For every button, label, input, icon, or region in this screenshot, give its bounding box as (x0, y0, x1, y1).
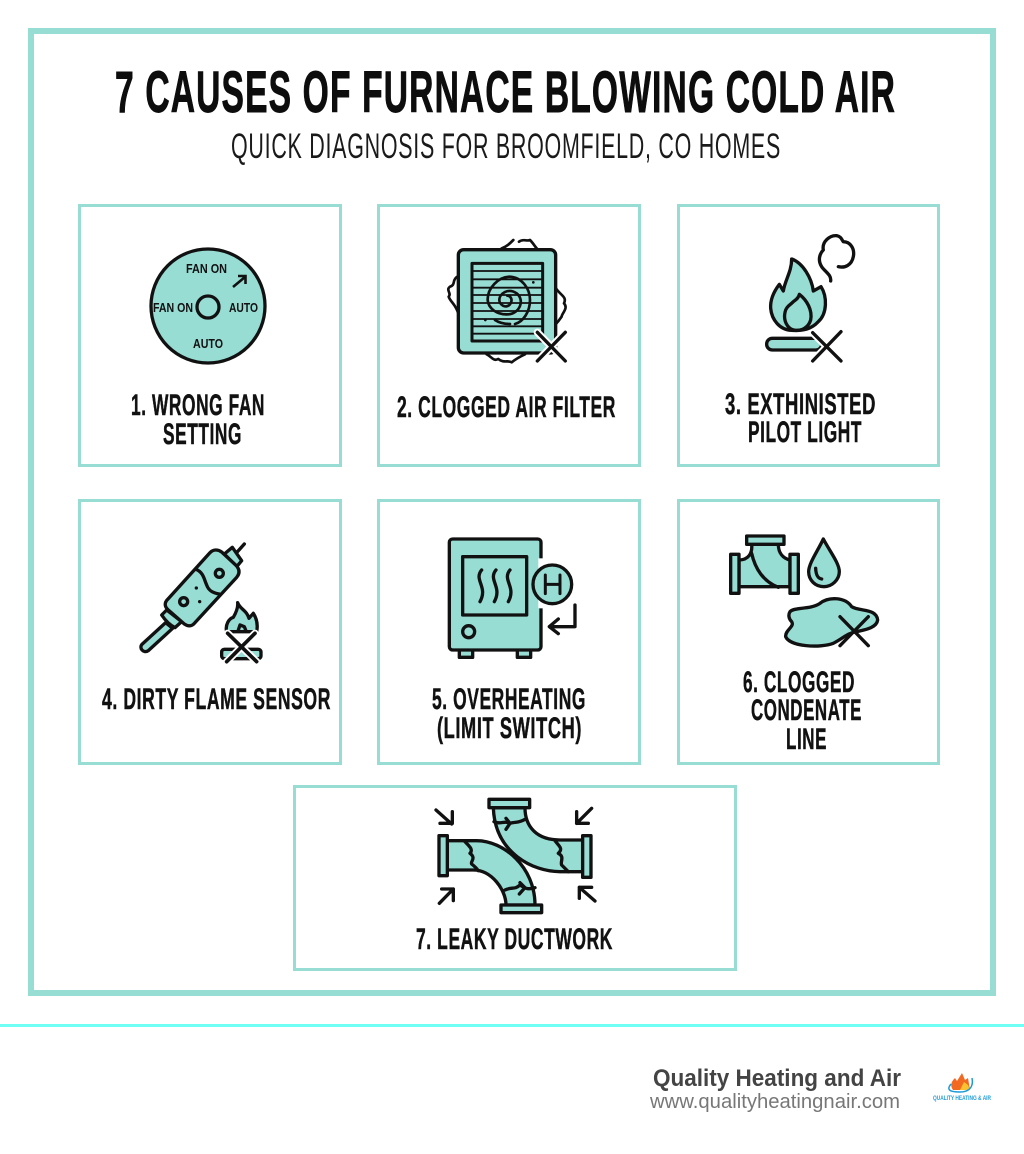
icon: leaky ducts (436, 799, 595, 913)
logo (933, 1073, 992, 1102)
icon: clogged filter (448, 240, 566, 362)
label: 3. EXTHINISTED (725, 388, 876, 421)
panel: 3 extinguished pilot light (678, 206, 938, 466)
label: LINE (786, 723, 827, 756)
label (432, 683, 586, 745)
label: 1. WRONG FAN (131, 389, 265, 422)
label: 6. CLOGGED (743, 666, 855, 699)
panel: 7 leaky ductwork (294, 786, 736, 970)
footer: website: www.qualityheatingnair.com (649, 1091, 900, 1113)
label: CONDENATE (751, 694, 862, 727)
icon: fan dial: FAN ON (186, 261, 227, 276)
label: (LIMIT SWITCH) (437, 712, 582, 745)
icon: flame and smoke (767, 236, 854, 361)
label: 7. LEAKY DUCTWORK (416, 923, 613, 956)
label (743, 666, 862, 756)
footer: company name: Quality Heating and Air (653, 1065, 901, 1092)
icon: fan dial: FAN ON (153, 300, 193, 315)
label: 4. DIRTY FLAME SENSOR (102, 683, 331, 716)
icon: overheating furnace (449, 539, 575, 657)
panel: 6 clogged condensate line (678, 500, 938, 764)
label: SETTING (163, 418, 242, 451)
panel: 1 wrong fan setting (80, 206, 340, 466)
icon: fan dial: AUTO (193, 336, 223, 351)
icon: fan dial (151, 249, 265, 363)
label: 2. CLOGGED AIR FILTER (397, 391, 616, 424)
panel: 4 dirty flame sensor (80, 500, 340, 764)
icon: pipe, drop and puddle (731, 536, 878, 646)
label: 5. OVERHEATING (432, 683, 586, 716)
logo: QUALITY HEATING & AIR (933, 1096, 992, 1102)
label: PILOT LIGHT (748, 416, 862, 449)
footer divider (0, 1024, 1024, 1027)
outer frame (31, 31, 993, 993)
panel: 5 overheating limit switch (378, 500, 640, 764)
label (725, 388, 876, 449)
icon: fan dial: AUTO (229, 300, 258, 315)
label (131, 389, 265, 451)
icon: flame sensor (141, 544, 261, 662)
panel: 2 clogged air filter (378, 206, 640, 466)
